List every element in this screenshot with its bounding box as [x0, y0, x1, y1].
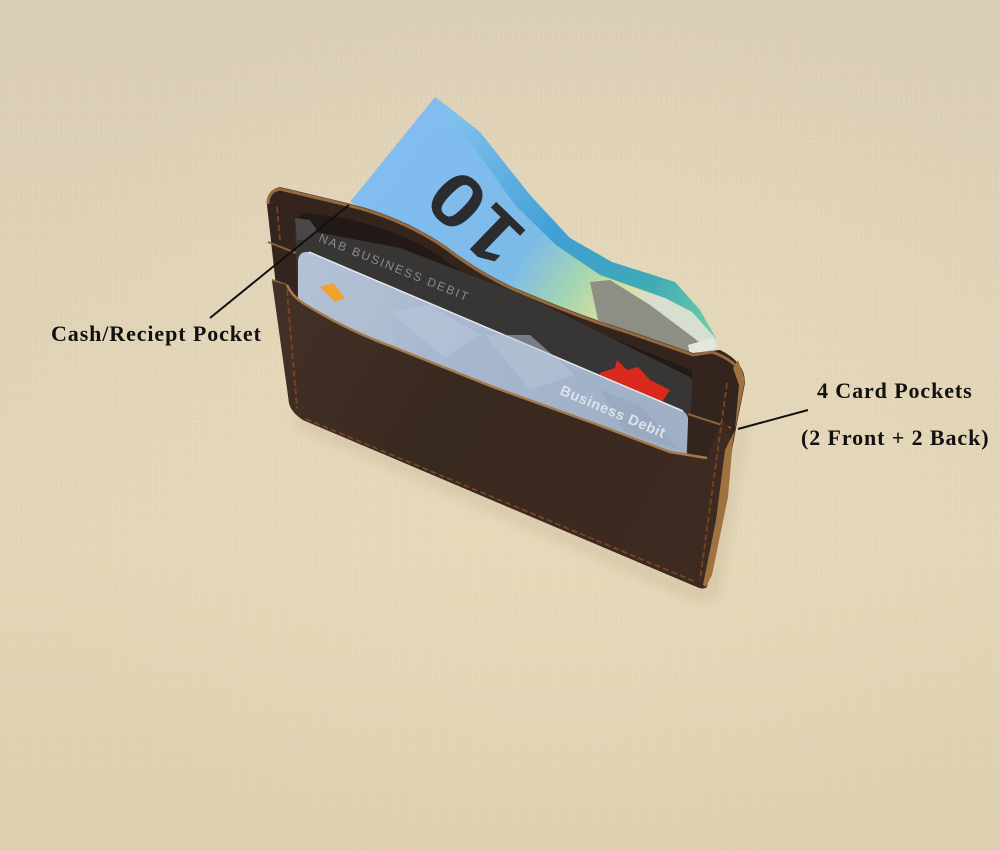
banknote numeral: 10: [409, 151, 541, 283]
dark card: NAB BUSINESS DEBIT: [317, 231, 472, 304]
light card: [298, 252, 688, 470]
leader line: cash pocket: [210, 205, 349, 318]
label: card pockets: 4 Card Pockets: [817, 378, 973, 403]
banknote portrait area: [590, 280, 712, 360]
banknote white tip: [688, 338, 717, 360]
wallet back silhouette: [267, 187, 745, 588]
wallet top rim: [268, 189, 743, 383]
dark card: [295, 218, 692, 470]
banknote: [350, 97, 717, 360]
leader line: card pockets: [738, 410, 808, 429]
light card: Business Debit: [557, 383, 668, 442]
banknote fold strip: [435, 97, 717, 340]
front pocket: [272, 281, 731, 588]
card facets: [390, 305, 480, 358]
shadow under wallet: [295, 415, 746, 598]
label: card pockets detail: (2 Front + 2 Back): [801, 425, 989, 450]
leather right edge: [703, 360, 745, 587]
red star logo: [600, 360, 670, 405]
second layer right side: [688, 414, 732, 480]
layer seams: [268, 242, 731, 428]
stitching: [277, 207, 727, 582]
label: cash pocket: Cash/Reciept Pocket: [51, 321, 262, 346]
wallet photo: [267, 97, 746, 598]
card chip: [320, 283, 345, 302]
dark interior: [295, 214, 692, 470]
pocket lip: [287, 285, 707, 458]
